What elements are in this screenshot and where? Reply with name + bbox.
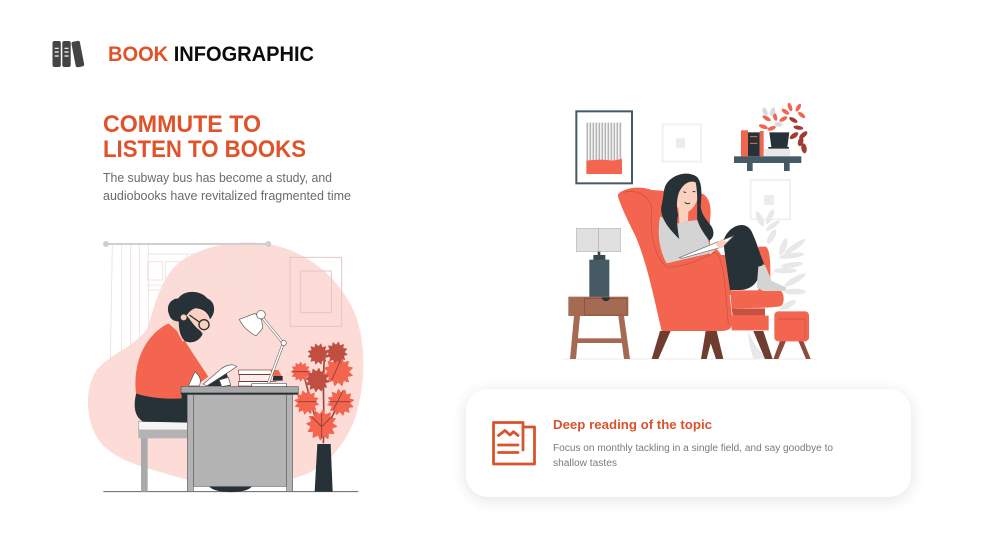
background plant: [748, 208, 807, 358]
beard: [179, 313, 203, 342]
background blob: [88, 242, 363, 485]
window and curtains: [109, 245, 261, 419]
logo: book spines icon: [52, 40, 85, 68]
open book and hands: [188, 365, 237, 387]
card heading: Deep reading of the topic: [553, 417, 712, 432]
table lamp: [576, 228, 621, 297]
card shadow: [466, 392, 911, 500]
face: [188, 310, 211, 334]
faint frames: [663, 124, 790, 219]
subheading text: The subway bus has become a study, and: [103, 171, 332, 185]
glasses: [189, 315, 209, 330]
desk: [181, 387, 298, 492]
heading: commute to listen to books: COMMUTE TO: [103, 111, 261, 138]
potted plant: [291, 340, 356, 492]
illustration: man reading at desk: [88, 241, 363, 492]
sock: [757, 265, 787, 291]
hand: [716, 239, 727, 249]
illustration: woman reading in armchair: [563, 102, 817, 359]
desk lamp: [239, 310, 287, 387]
framed art: [576, 111, 632, 183]
neck: [172, 313, 190, 342]
side table: [568, 297, 630, 359]
feature card: [466, 389, 911, 497]
floor: [103, 490, 358, 493]
header title: BOOK INFOGRAPHIC: [108, 43, 314, 66]
shirt: [135, 323, 208, 399]
legs: [723, 225, 764, 290]
chair front and armrest: [618, 188, 733, 331]
icon: document: [494, 422, 534, 464]
floor line: [563, 358, 817, 360]
subheading text: [103, 171, 351, 203]
card description: Focus on monthly tackling in a single field, and say goodbye to: [553, 443, 833, 454]
card description: [553, 443, 833, 469]
face details: [683, 192, 695, 204]
open book: [679, 236, 734, 258]
ear: [181, 314, 187, 320]
ottoman: [773, 311, 811, 359]
wall shelf with books and plant: [734, 102, 809, 171]
hair: [168, 292, 214, 322]
hair: [661, 174, 713, 241]
wall frame: [290, 257, 342, 326]
heading: commute to listen to books: LISTEN TO BOOKS: [103, 136, 306, 163]
armchair back, seat and legs: [652, 190, 784, 359]
card description: shallow tastes: [553, 458, 617, 469]
sweater: [659, 217, 717, 263]
neck and face: [674, 179, 699, 223]
trousers: [135, 392, 188, 423]
stool: [138, 422, 188, 492]
stack of books: [238, 370, 276, 386]
curtain rod: [103, 241, 271, 247]
heading: commute to listen to books: [103, 111, 306, 163]
subheading text: audiobooks have revitalized fragmented time: [103, 189, 351, 203]
